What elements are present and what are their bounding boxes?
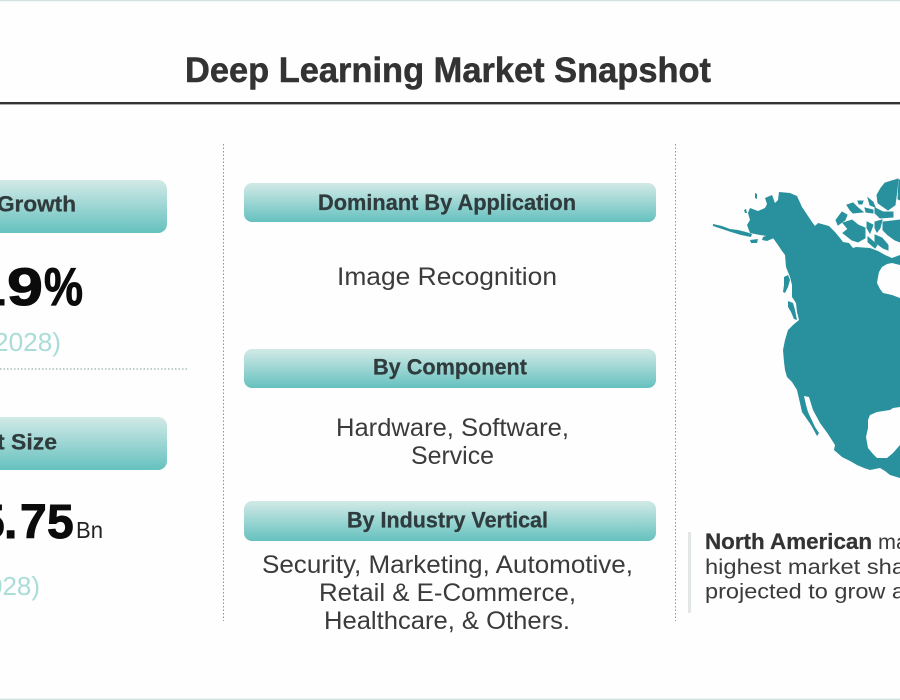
text: industry verticals xyxy=(262,551,633,635)
growth rate value xyxy=(0,258,83,317)
text: components: Service xyxy=(411,442,494,470)
growth rate value: 9 xyxy=(7,258,43,317)
panel: market size xyxy=(0,417,167,601)
callout: regional note: highest market sha xyxy=(705,555,900,579)
text: industry verticals: Security, Marketing, Automotive, xyxy=(262,551,633,579)
callout: regional note: projected to grow a xyxy=(705,580,900,604)
heading: market size xyxy=(0,417,167,470)
text: industry verticals: Retail & E-Commerce, xyxy=(319,579,576,607)
heading: by component: By Component xyxy=(373,354,528,380)
text: application: Image Recognition xyxy=(337,263,557,291)
title: Deep Learning Market Snapshot xyxy=(185,51,711,90)
text: industry verticals: Healthcare, & Others. xyxy=(324,607,570,635)
text: components xyxy=(336,414,569,470)
callout: regional note xyxy=(688,529,900,613)
map: North America xyxy=(713,192,900,478)
heading: by industry vertical: By Industry Vertical xyxy=(347,508,548,532)
heading: dominant by application: Dominant By Application xyxy=(318,190,576,215)
heading: by industry vertical xyxy=(244,501,656,541)
heading: by component xyxy=(244,349,656,388)
heading: growth xyxy=(0,180,167,233)
growth rate value: % xyxy=(44,258,83,317)
market size value: Bn xyxy=(76,517,103,543)
panel: market growth xyxy=(0,180,167,357)
panel: segments xyxy=(244,183,656,635)
text: components: Hardware, Software, xyxy=(336,414,569,442)
map: Arctic islands xyxy=(836,179,900,250)
callout: regional note: North American xyxy=(705,529,872,554)
heading: dominant by application xyxy=(244,183,656,222)
